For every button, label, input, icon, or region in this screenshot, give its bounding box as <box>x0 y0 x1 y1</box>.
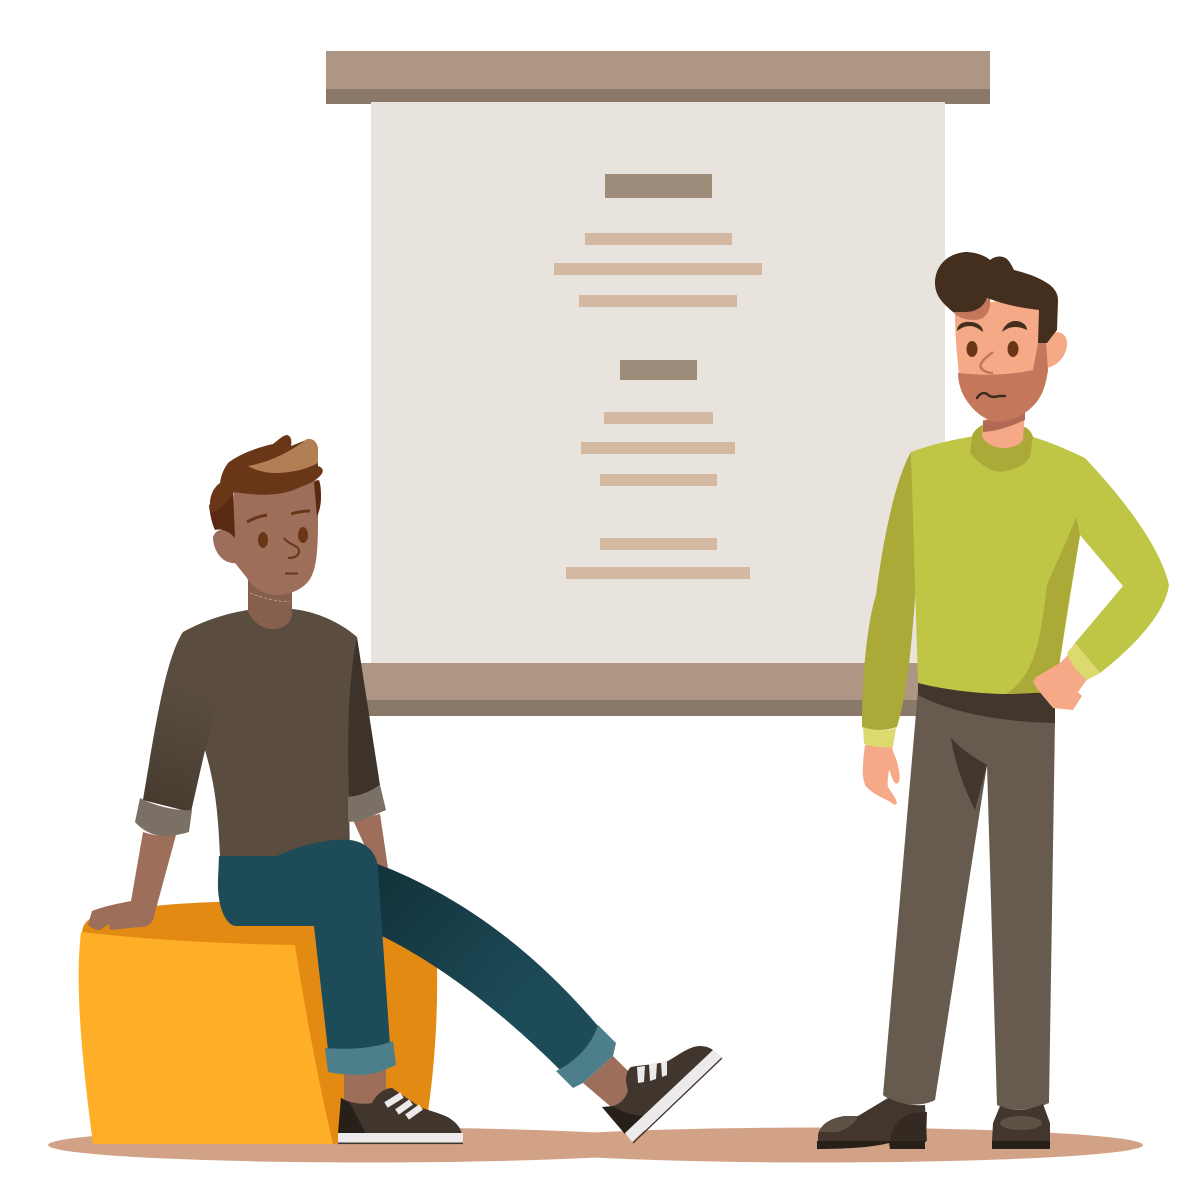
right cuff <box>1067 643 1100 680</box>
ear <box>213 530 237 563</box>
ear <box>1044 332 1067 368</box>
top roller <box>326 51 990 104</box>
belt shadow <box>918 682 1055 723</box>
seat front face <box>79 932 333 1144</box>
seated man <box>88 435 722 1144</box>
second text lines placeholder <box>581 412 735 486</box>
far calf <box>583 1056 645 1112</box>
near cuff <box>135 798 192 836</box>
left cuff <box>863 727 896 747</box>
screen canvas <box>371 102 945 664</box>
orange seat <box>79 901 437 1144</box>
standing man <box>817 252 1169 1149</box>
sweater torso and arm <box>143 609 357 856</box>
screen heading placeholder <box>605 174 712 198</box>
left hand <box>863 745 900 805</box>
far sleeve <box>348 637 380 797</box>
beard <box>958 343 1048 422</box>
eyes <box>258 527 308 548</box>
near shoe <box>338 1088 463 1144</box>
seat back side <box>82 901 437 1144</box>
mouth <box>977 393 1005 398</box>
far trouser cuff <box>556 1025 616 1088</box>
left dress shoe <box>817 1098 927 1149</box>
eyebrows <box>957 321 1027 332</box>
far shoe <box>602 1046 722 1143</box>
trouser fold <box>951 738 987 810</box>
eyes <box>966 341 1018 357</box>
hair highlight <box>248 439 318 473</box>
face <box>955 300 1048 382</box>
near trouser leg <box>883 690 1055 1109</box>
head <box>935 252 1067 422</box>
hair <box>935 252 1058 343</box>
eyebrows, nose and mouth <box>247 511 310 574</box>
right hand <box>1033 655 1088 710</box>
second heading placeholder <box>620 360 697 380</box>
near arm and hand <box>88 832 176 930</box>
near trouser cuff <box>325 1041 396 1075</box>
forehead shadow <box>953 298 990 320</box>
ground shadow <box>48 1128 1143 1162</box>
far cuff <box>348 785 386 822</box>
back hair <box>209 491 235 538</box>
bottom roller <box>360 663 920 716</box>
near thigh and shin <box>218 840 390 1052</box>
head <box>209 435 323 602</box>
sweater side shade <box>1005 517 1080 694</box>
first text lines placeholder <box>554 233 762 307</box>
face <box>233 480 318 595</box>
far leg <box>368 860 598 1070</box>
projection screen <box>326 51 990 716</box>
hair <box>210 435 323 513</box>
third text lines placeholder <box>566 538 750 579</box>
far arm <box>353 814 388 868</box>
sweater body and right arm <box>911 436 1169 694</box>
sideburn <box>314 480 321 517</box>
neck <box>982 410 1025 448</box>
neck <box>248 578 292 629</box>
nose <box>981 352 993 373</box>
neck shadow <box>983 412 1025 432</box>
left sleeve <box>862 452 916 730</box>
right dress shoe <box>992 1104 1050 1149</box>
collar <box>970 425 1033 472</box>
neck line <box>250 593 290 602</box>
sleeve shade <box>143 632 217 812</box>
near calf <box>344 1068 386 1108</box>
